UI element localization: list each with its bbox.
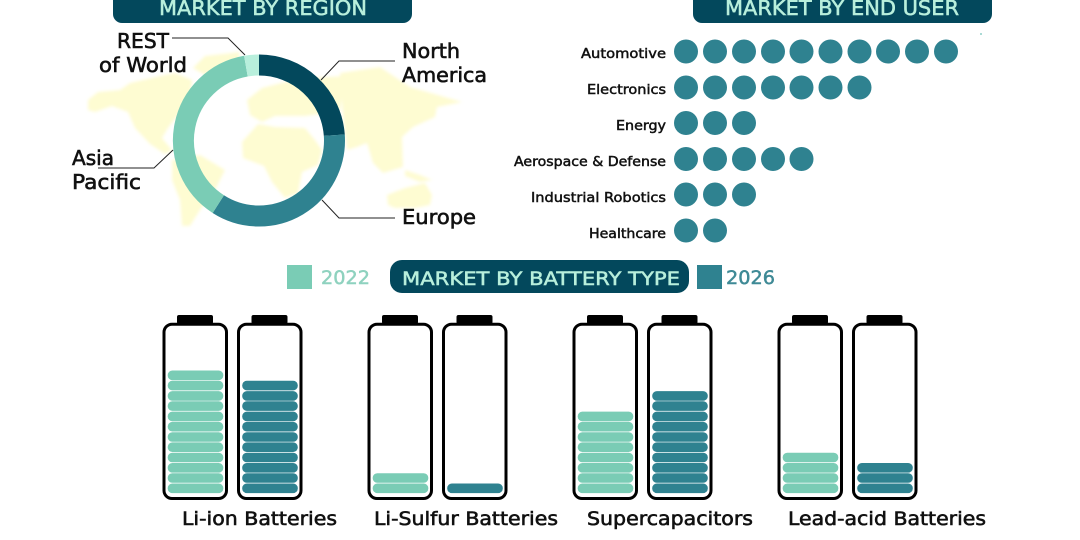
label: Asia Pacific: Asia bbox=[72, 146, 114, 170]
label: Li-ion Batteries: Li-ion Batteries bbox=[182, 508, 337, 530]
segment: North America bbox=[259, 65, 334, 135]
battery group: Lead-acid Batteries bbox=[779, 315, 986, 530]
row: Energy, 3 dots bbox=[616, 111, 756, 135]
row: Energy, 3 dots: Energy bbox=[616, 118, 666, 134]
row: Aerospace and Defense, 5 dots bbox=[514, 147, 814, 171]
segment: Rest of World bbox=[246, 65, 259, 66]
row: Electronics, 7 dots bbox=[587, 76, 872, 100]
label: North America: North bbox=[402, 39, 460, 63]
row: Electronics, 7 dots: Electronics bbox=[587, 82, 666, 98]
row: Automotive, 10 dots: Automotive bbox=[581, 46, 666, 62]
battery: Lead-acid 2026, 3 bars bbox=[854, 315, 916, 498]
battery group: Li-ion Batteries bbox=[164, 315, 337, 530]
battery: Supercapacitors 2022, 8 bars bbox=[574, 315, 636, 498]
label: Li-Sulfur Batteries: Li-Sulfur Batteries bbox=[374, 508, 558, 530]
label: Asia Pacific: Pacific bbox=[72, 170, 141, 194]
segment: Asia Pacific bbox=[183, 66, 246, 204]
row: Aerospace and Defense, 5 dots: Aerospace & Defense bbox=[514, 154, 666, 170]
heading: market by battery type: MARKET BY BATTERY TYPE bbox=[402, 269, 680, 290]
label: Supercapacitors: Supercapacitors bbox=[587, 508, 753, 530]
label: Rest of World bbox=[99, 29, 245, 77]
row: Automotive, 10 dots bbox=[581, 40, 958, 64]
row: Healthcare, 2 dots: Healthcare bbox=[589, 226, 666, 242]
battery: Li-Sulfur 2022, 2 bars bbox=[369, 315, 432, 498]
decorative speck bbox=[980, 33, 982, 35]
label: Asia Pacific bbox=[72, 146, 173, 194]
heading: market by battery type bbox=[390, 260, 689, 293]
donut chart: market by region bbox=[183, 65, 334, 216]
label: Lead-acid Batteries: Lead-acid Batteries bbox=[788, 508, 986, 530]
battery: Supercapacitors 2026, 10 bars bbox=[648, 315, 711, 498]
battery group: Li-Sulfur Batteries bbox=[369, 315, 558, 530]
legend: 2026 bbox=[697, 265, 775, 289]
row: Industrial Robotics, 3 dots bbox=[531, 182, 756, 206]
battery group: Supercapacitors bbox=[574, 315, 753, 530]
battery: Li-ion 2022, 12 bars bbox=[164, 315, 226, 498]
label: North America: America bbox=[402, 63, 487, 87]
legend: 2026: 2026 bbox=[726, 267, 775, 289]
label: Rest of World: REST bbox=[117, 29, 170, 53]
battery: Li-Sulfur 2026, 1 bar bbox=[444, 315, 506, 498]
label: Europe bbox=[322, 200, 476, 229]
label: Rest of World: of World bbox=[99, 53, 187, 77]
heading: market by region bbox=[113, 0, 412, 23]
battery: Lead-acid 2022, 4 bars bbox=[779, 315, 842, 498]
label: Europe: Europe bbox=[402, 205, 476, 229]
heading: market by end user bbox=[693, 0, 992, 23]
world map background bbox=[88, 52, 462, 226]
legend: 2022: 2022 bbox=[321, 267, 370, 289]
battery: Li-ion 2026, 11 bars bbox=[238, 315, 301, 498]
row: Industrial Robotics, 3 dots: Industrial Robotics bbox=[531, 190, 666, 206]
label: North America bbox=[321, 39, 487, 87]
dot chart: market by end user bbox=[514, 40, 958, 242]
legend: 2022 bbox=[287, 265, 370, 289]
segment: Europe bbox=[218, 135, 334, 216]
row: Healthcare, 2 dots bbox=[589, 218, 727, 242]
